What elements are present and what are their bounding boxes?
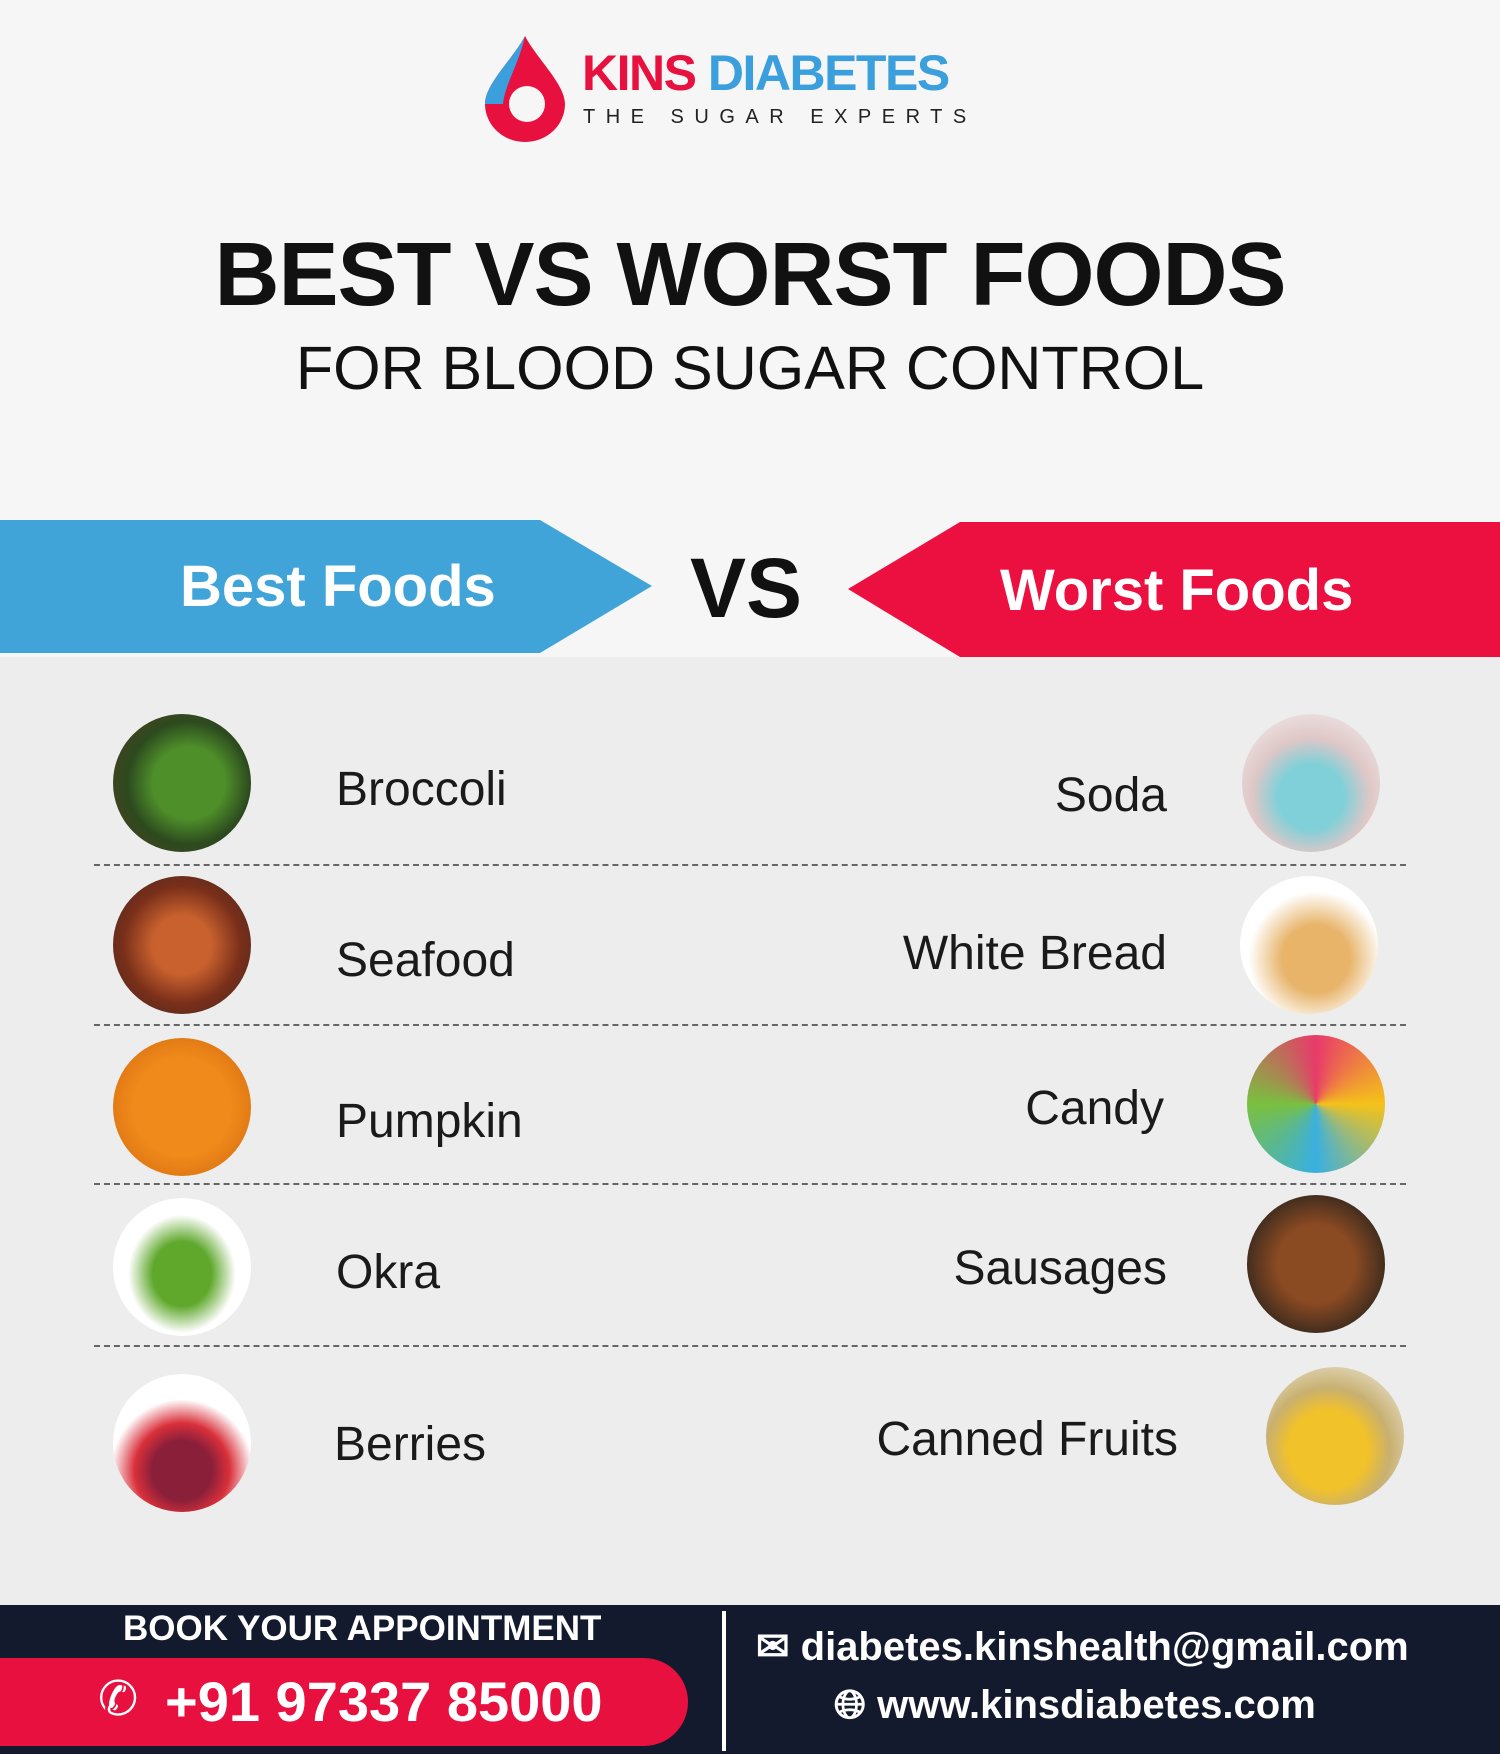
body background xyxy=(0,657,1500,1607)
tagline: THE SUGAR EXPERTS xyxy=(583,106,977,128)
logo xyxy=(485,36,977,142)
icon: soda xyxy=(1242,714,1380,852)
footer xyxy=(0,1605,1500,1754)
email: ✉ diabetes.kinshealth@gmail.com xyxy=(756,1625,1409,1669)
text: Okra: Okra xyxy=(336,1246,440,1299)
subtitle: FOR BLOOD SUGAR CONTROL xyxy=(296,334,1204,402)
book appointment label: BOOK YOUR APPOINTMENT xyxy=(123,1609,601,1648)
title: BEST VS WORST FOODS xyxy=(214,225,1286,325)
text: Sausages: Sausages xyxy=(954,1242,1167,1295)
banner: worst foods: Worst Foods xyxy=(1000,558,1353,623)
icon: seafood xyxy=(113,876,251,1014)
banner: best foods: Best Foods xyxy=(180,554,496,619)
website: 🌐︎ www.kinsdiabetes.com xyxy=(834,1683,1316,1727)
text: White Bread: White Bread xyxy=(903,927,1167,980)
icon: okra xyxy=(113,1198,251,1336)
icon: white bread xyxy=(1240,876,1378,1014)
text: Pumpkin: Pumpkin xyxy=(336,1095,523,1148)
icon: pumpkin xyxy=(113,1038,251,1176)
phone pill xyxy=(0,1658,688,1746)
icon: candy xyxy=(1247,1035,1385,1173)
icon: phone: ✆ xyxy=(98,1673,138,1726)
text: Berries: Berries xyxy=(334,1418,486,1471)
VS: VS xyxy=(690,541,802,635)
text: Candy: Candy xyxy=(1025,1082,1164,1135)
dividers xyxy=(94,864,1406,866)
banner: worst foods xyxy=(848,522,1500,657)
text: Canned Fruits: Canned Fruits xyxy=(877,1413,1178,1466)
icon: canned fruits xyxy=(1266,1367,1404,1505)
icon: berries xyxy=(113,1374,251,1512)
text: Seafood: Seafood xyxy=(336,934,515,987)
brand name: KINS DIABETES xyxy=(582,45,949,101)
text: Broccoli: Broccoli xyxy=(336,763,507,816)
banner: best foods xyxy=(0,520,652,653)
icon: sausages xyxy=(1247,1195,1385,1333)
phone number: +91 97337 85000 xyxy=(165,1670,603,1733)
icon: blood drop xyxy=(485,36,565,142)
text: Soda: Soda xyxy=(1055,769,1167,822)
icon: broccoli xyxy=(113,714,251,852)
